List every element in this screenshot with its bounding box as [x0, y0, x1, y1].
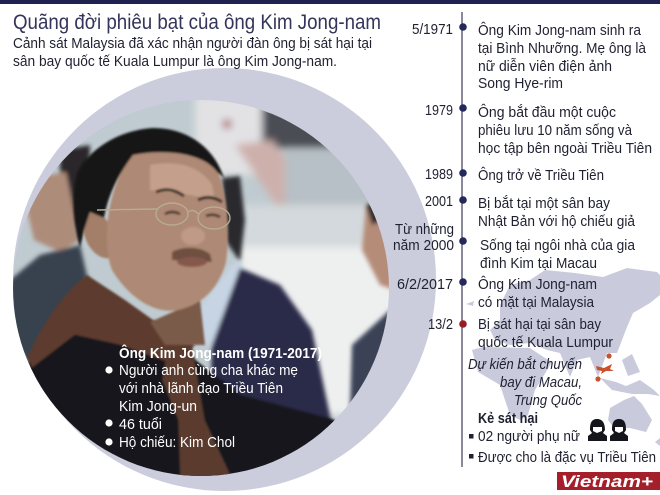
timeline events: Ông Kim Jong-nam [478, 276, 597, 293]
icon: two women [588, 419, 628, 441]
timeline dates: Từ những [395, 221, 454, 238]
portrait photo [13, 100, 389, 476]
logo: Vietnam+: Vietnam+ [561, 472, 653, 491]
flight note: bay đi Macau, [500, 374, 582, 391]
timeline events: Nhật Bản với hộ chiếu giả [478, 213, 636, 230]
timeline events: Bị bắt tại một sân bay [478, 195, 610, 212]
timeline events: nữ diễn viên điện ảnh [478, 58, 612, 75]
attackers list: 02 người phụ nữ [478, 428, 580, 445]
intro text [13, 35, 372, 70]
profile text [105, 344, 322, 451]
timeline events: đình Kim tại Macau [480, 255, 597, 272]
timeline dates: 1989 [425, 166, 453, 183]
timeline events: có mặt tại Malaysia [478, 294, 595, 311]
title: Quãng đời phiêu bạt của ông Kim Jong-nam [13, 11, 381, 34]
intro text: sân bay quốc tế Kuala Lumpur là ông Kim Jong-nam. [13, 53, 337, 70]
portrait circle background [13, 68, 436, 491]
flight note [468, 356, 582, 409]
timeline events: tại Bình Nhưỡng. Mẹ ông là [478, 40, 647, 57]
timeline events: Sống tại ngôi nhà của gia [480, 237, 636, 254]
top bar [0, 0, 660, 4]
timeline axis [461, 12, 463, 467]
timeline events: Ông Kim Jong-nam sinh ra [478, 22, 642, 39]
background person right [346, 201, 389, 406]
background person middle [201, 172, 334, 472]
glasses [97, 203, 230, 229]
timeline dates: 1979 [425, 102, 453, 119]
attackers heading: Kẻ sát hại [478, 410, 538, 427]
profile text: với nhà lãnh đạo Triều Tiên [119, 380, 283, 397]
background person left [10, 145, 90, 362]
timeline dates [393, 21, 454, 333]
intro text: Cảnh sát Malaysia đã xác nhận người đàn ông bị sát hại tại [13, 35, 372, 52]
profile text: Ông Kim Jong-nam (1971-2017) [119, 344, 322, 362]
world map [466, 268, 660, 446]
profile text: Người anh cùng cha khác mẹ [119, 362, 298, 379]
timeline events: quốc tế Kuala Lumpur [478, 334, 613, 351]
timeline dates: năm 2000 [393, 237, 454, 254]
profile text: Hộ chiếu: Kim Chol [119, 434, 235, 451]
timeline events [478, 22, 652, 351]
timeline dates: 6/2/2017 [397, 276, 453, 293]
head [74, 128, 228, 345]
timeline events: Bị sát hại tại sân bay [478, 316, 601, 333]
timeline dates: 5/1971 [412, 21, 453, 38]
timeline events: Ông bắt đầu một cuộc [478, 104, 616, 121]
timeline events: phiêu lưu 10 năm sống và [478, 122, 633, 139]
timeline dates: 2001 [425, 193, 453, 210]
profile text: Kim Jong-un [119, 398, 197, 415]
timeline events: Song Hye-rim [478, 75, 563, 92]
map markers [595, 353, 614, 382]
timeline events: Ông trở về Triều Tiên [478, 167, 604, 184]
profile text: 46 tuổi [119, 416, 162, 433]
timeline dots [459, 23, 467, 328]
flight note: Dự kiến bắt chuyến [468, 356, 582, 373]
timeline dates: 13/2 [428, 316, 453, 333]
scarf [27, 275, 232, 478]
flight note: Trung Quốc [514, 392, 582, 409]
attackers list [469, 428, 656, 466]
jacket [28, 334, 336, 476]
